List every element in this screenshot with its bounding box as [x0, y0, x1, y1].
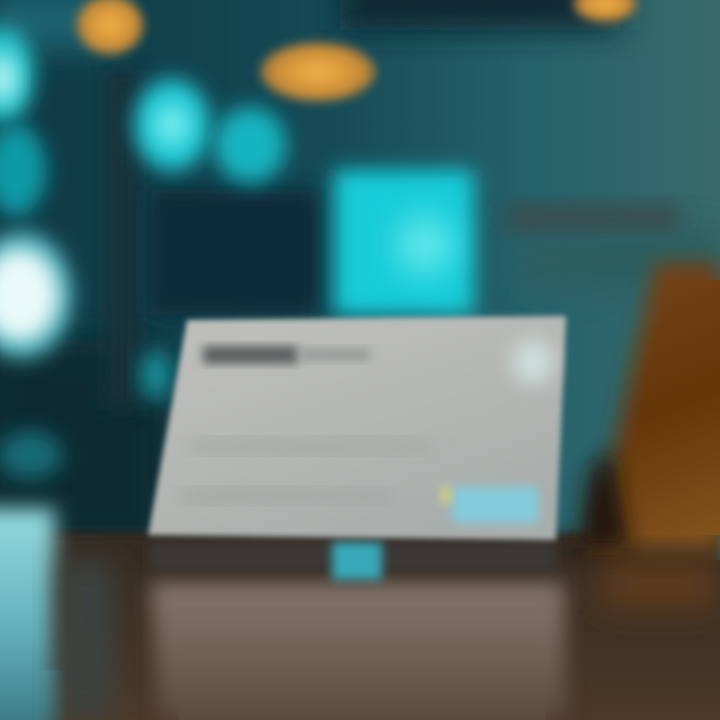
card heading smudge — [203, 346, 298, 364]
shadow beneath card — [150, 542, 555, 570]
card emblem — [513, 340, 553, 384]
card yellow accent — [440, 486, 452, 504]
brown tent card — [578, 262, 720, 548]
card text smudges — [190, 440, 430, 452]
table surface — [0, 508, 720, 720]
hanging lamps — [76, 0, 637, 102]
dark panel behind card — [150, 190, 320, 315]
cyan card stand — [332, 542, 382, 580]
bright cyan panel — [334, 170, 474, 315]
lamp: left — [76, 0, 144, 55]
credit card — [148, 316, 566, 540]
white glowing orb — [0, 231, 72, 359]
lamp: centre — [260, 42, 376, 102]
card reflection on table — [150, 582, 565, 720]
dark shelf right — [505, 205, 680, 229]
lamp: right — [573, 0, 637, 22]
dark pillar — [104, 70, 140, 410]
cyan glowing lights — [0, 27, 286, 479]
card cyan label — [452, 487, 538, 523]
